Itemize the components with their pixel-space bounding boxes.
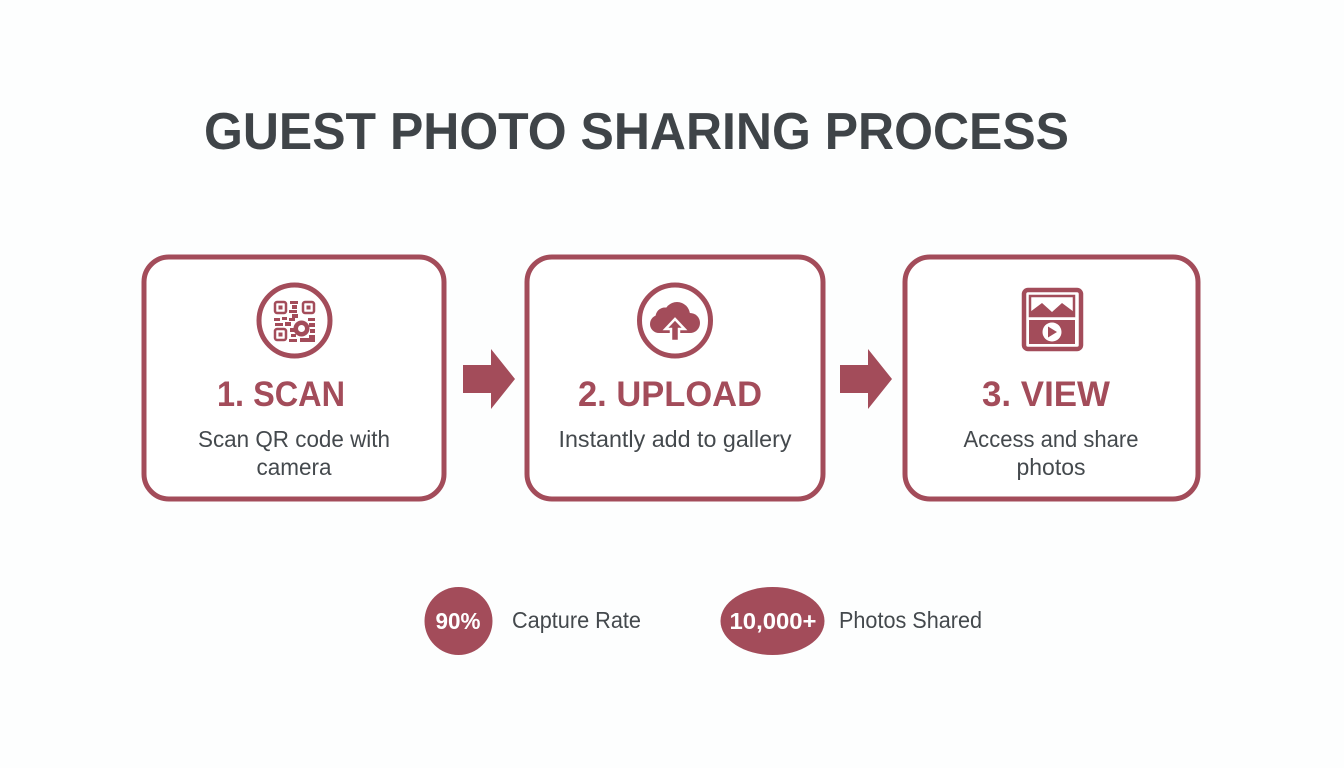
step heading: 2. UPLOAD [578,375,762,414]
step description: Instantly add to gallery [558,426,792,452]
arrow: scan to upload [463,349,515,409]
step description [198,426,390,480]
panel: step 3 view [905,257,1198,499]
icon: QR code [259,285,330,356]
title: GUEST PHOTO SHARING PROCESS [204,103,1069,161]
panel: step 2 upload [527,257,823,499]
icon: photo and video gallery [1024,290,1081,349]
step heading: 3. VIEW [982,375,1110,414]
step description [964,426,1138,480]
stat: capture rate: Capture Rate [512,607,641,633]
icon: cloud upload [640,285,710,356]
step description: Access and share [964,426,1138,452]
stat: photos shared: Photos Shared [839,607,982,633]
stat: capture rate: 90% [436,608,480,634]
stat: capture rate [424,587,641,655]
panel: step 1 scan [144,257,444,499]
arrow: upload to view [840,349,892,409]
step heading: 1. SCAN [217,375,345,414]
step description: photos [1016,454,1086,480]
stat: photos shared: 10,000+ [730,608,816,634]
step description: camera [256,454,332,480]
step description: Scan QR code with [198,426,390,452]
stat: photos shared [720,587,982,655]
